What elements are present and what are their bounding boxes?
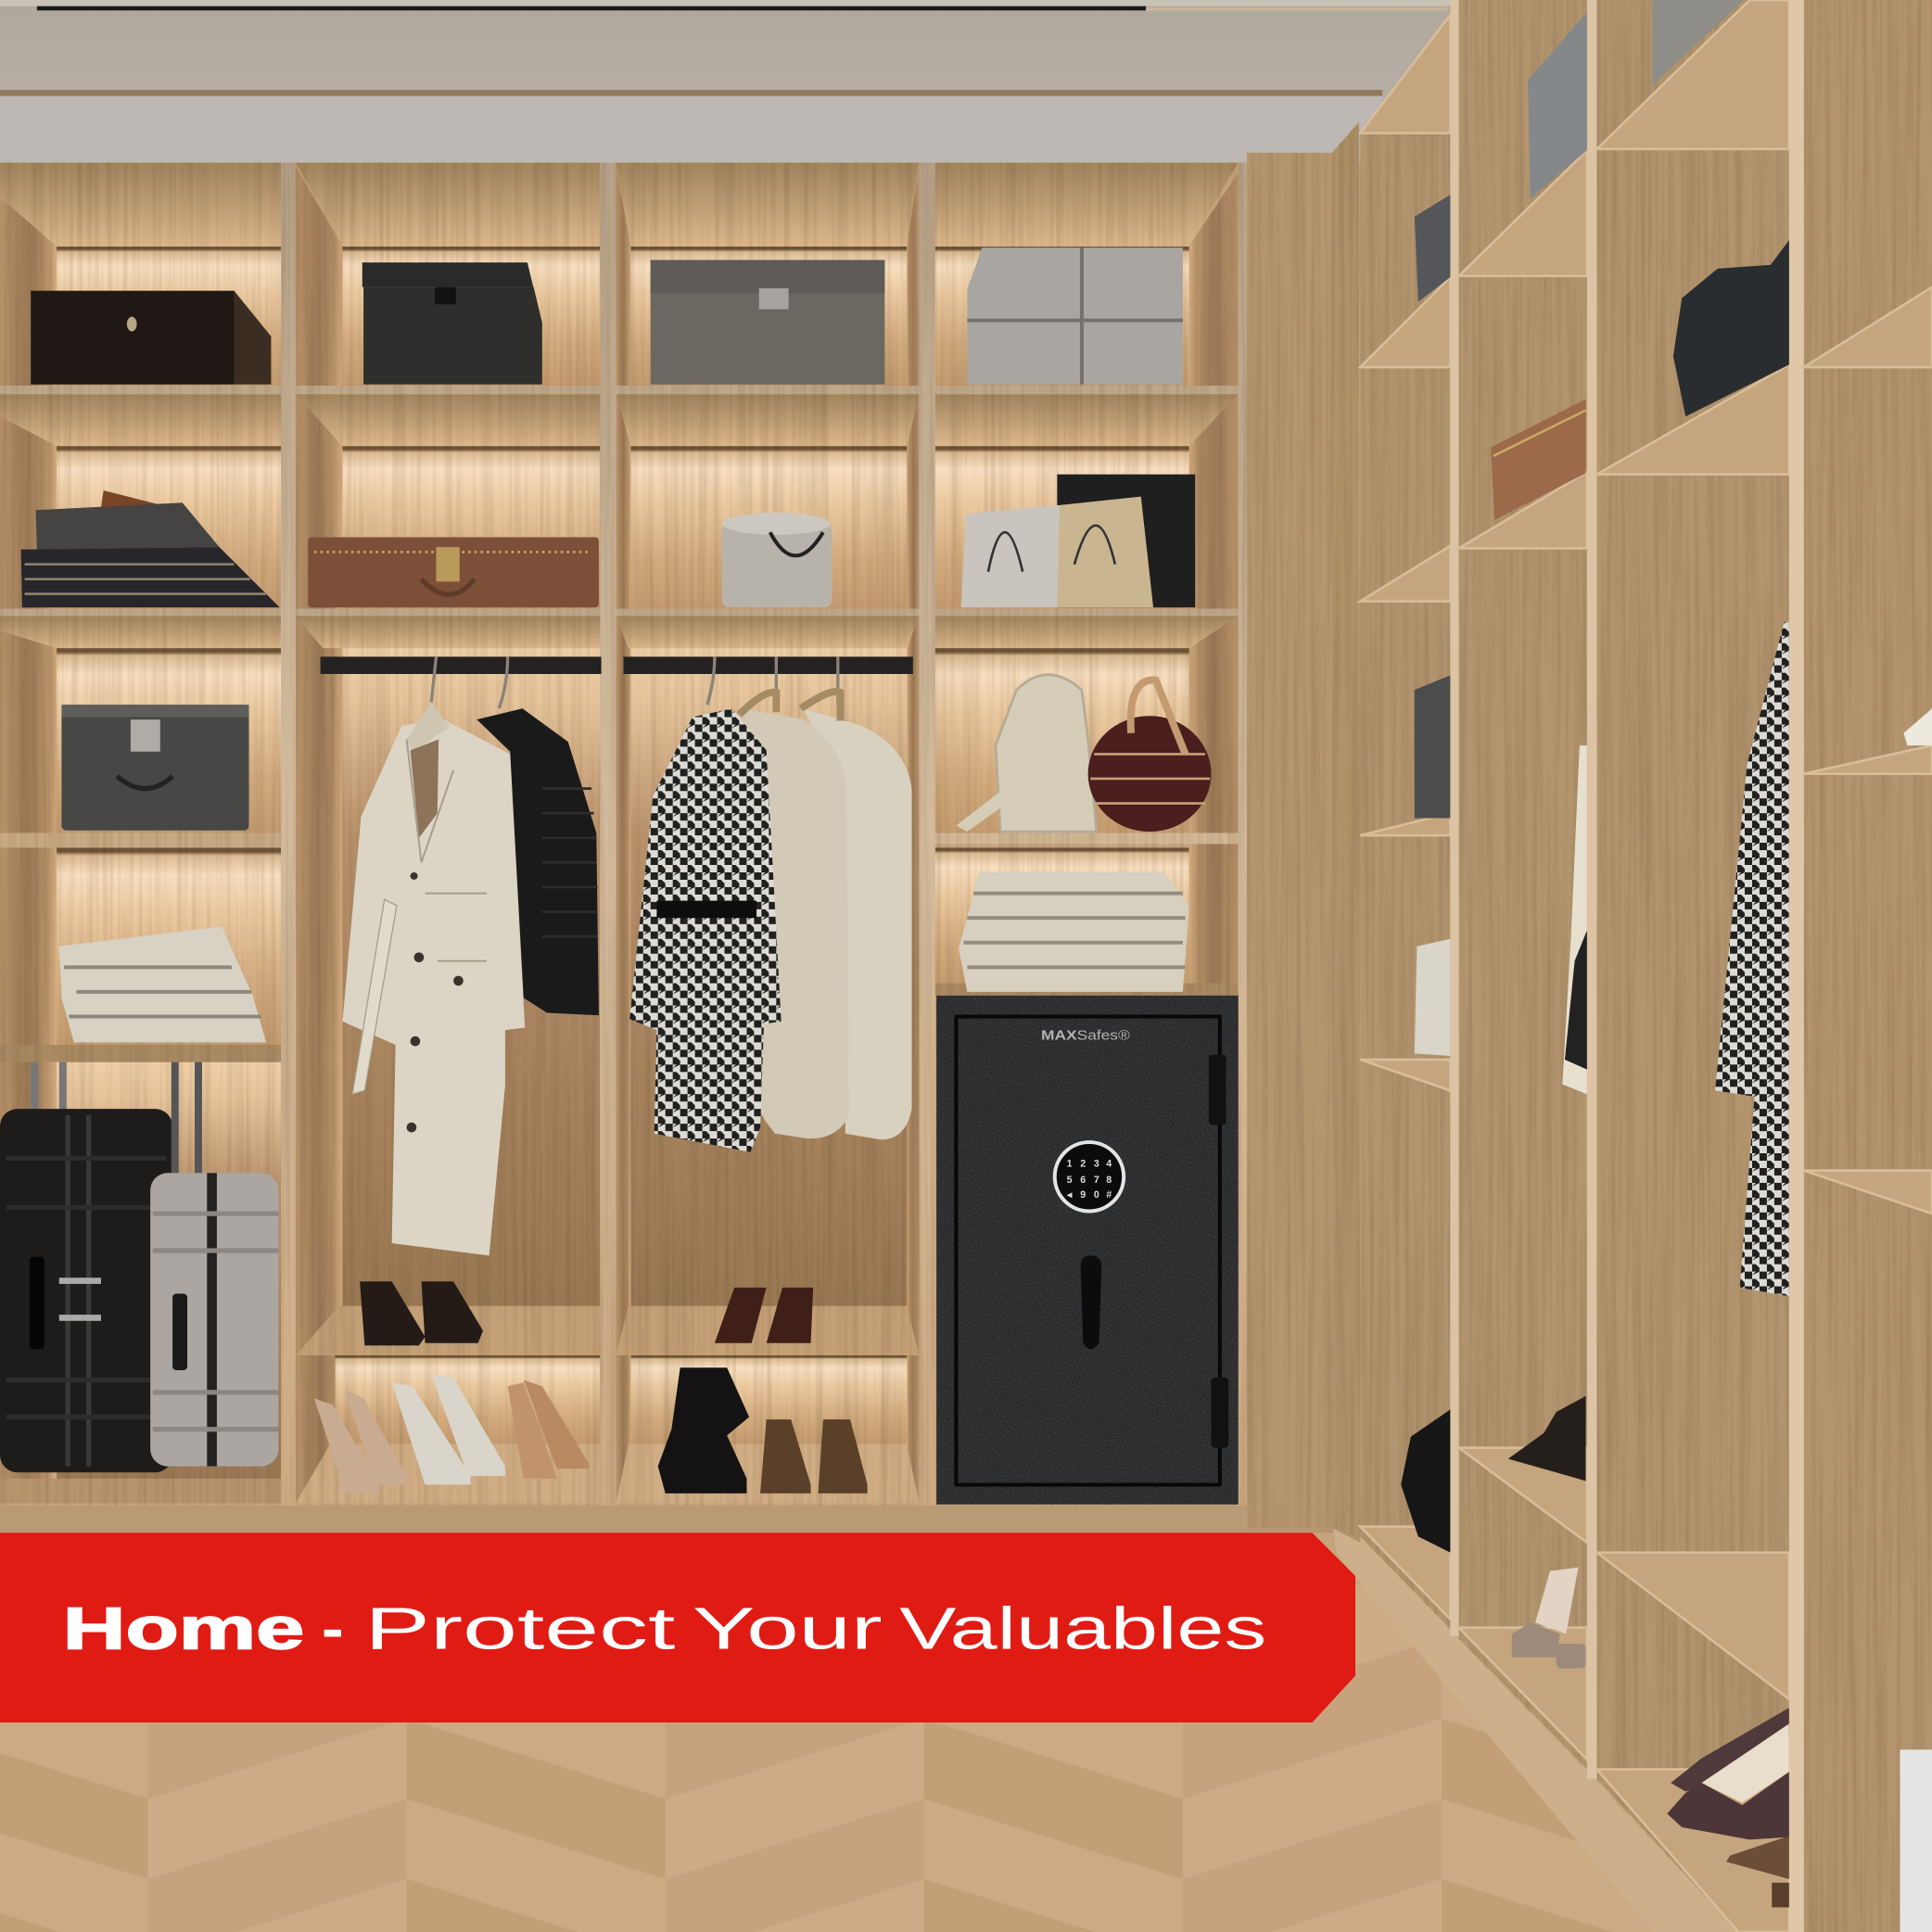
hanger hooks bbox=[707, 656, 838, 708]
shopping bags bbox=[961, 475, 1195, 607]
coat belt bbox=[352, 899, 397, 1094]
beige heels bbox=[1512, 1568, 1586, 1669]
garment bags bbox=[739, 692, 912, 1139]
coat hanger bbox=[407, 703, 450, 752]
black boots bbox=[658, 1367, 749, 1493]
left cabinet frame bbox=[0, 162, 1247, 1532]
black suitcase bbox=[0, 1062, 172, 1472]
items right wall bbox=[1401, 0, 1932, 1932]
electronic keypad lock bbox=[1055, 1142, 1124, 1211]
electronic keypad lock: ◂ bbox=[1066, 1189, 1073, 1201]
dress shoes bbox=[360, 1281, 483, 1345]
right wall shelves bbox=[1360, 0, 1932, 1932]
right wall back panels bbox=[1247, 0, 1932, 1932]
column 2 shelves bbox=[296, 162, 600, 1503]
items column 4 bbox=[956, 248, 1211, 992]
grey fabric box bbox=[651, 260, 884, 385]
coat buttons bbox=[407, 872, 464, 1132]
right wall wood grain bbox=[1247, 0, 1932, 1932]
dark wooden box bbox=[31, 291, 271, 385]
electronic keypad lock: 3 bbox=[1094, 1159, 1099, 1170]
corner stile bbox=[1332, 122, 1360, 1543]
hanging rail bbox=[624, 656, 913, 674]
brown trunk bbox=[308, 537, 599, 607]
electronic keypad lock: 7 bbox=[1094, 1175, 1099, 1186]
tower B shelves bbox=[1459, 150, 1587, 1760]
grey trunk bbox=[1415, 675, 1450, 819]
electronic keypad lock: 0 bbox=[1094, 1189, 1099, 1201]
banner title bbox=[63, 1595, 1266, 1661]
grey cylinder bbox=[1415, 195, 1450, 302]
round burgundy bag bbox=[1088, 680, 1211, 832]
white coat bbox=[1562, 745, 1587, 1094]
electronic keypad lock: 4 bbox=[1106, 1159, 1112, 1170]
brown shoes bbox=[760, 1419, 868, 1493]
electronic keypad lock: 5 bbox=[1067, 1175, 1073, 1186]
upper hinge bbox=[1209, 1055, 1226, 1125]
red banner bbox=[0, 1532, 1355, 1722]
dark fabric box bbox=[362, 262, 544, 385]
electronic keypad lock: 6 bbox=[1080, 1175, 1086, 1186]
black shoe bbox=[1508, 1396, 1586, 1481]
tower stile C/D bbox=[1789, 0, 1804, 1932]
lower hinge bbox=[1211, 1378, 1228, 1448]
grey storage boxes bbox=[967, 248, 1183, 385]
plaid lining bbox=[411, 739, 439, 838]
folded white linens bbox=[59, 926, 266, 1042]
grey trunk bbox=[61, 705, 248, 831]
grey suitcase bbox=[150, 1062, 278, 1467]
safe bbox=[936, 996, 1239, 1505]
door panel bbox=[956, 1016, 1220, 1485]
high heels bbox=[314, 1374, 589, 1493]
burgundy heels bbox=[1667, 1708, 1789, 1839]
black round bag bbox=[1401, 1409, 1450, 1553]
electronic keypad lock: # bbox=[1106, 1189, 1112, 1201]
safe body bbox=[936, 996, 1239, 1505]
tower stile A/B bbox=[1450, 0, 1459, 1636]
banner title: - bbox=[322, 1595, 344, 1661]
white folded linen bbox=[1415, 939, 1450, 1056]
houndstooth coat bbox=[629, 708, 782, 1152]
tower D shelves bbox=[1804, 287, 1932, 1214]
tower A shelves bbox=[1360, 15, 1450, 1619]
items column 1 bbox=[0, 291, 280, 1472]
black duffle bag bbox=[1673, 240, 1789, 416]
tower C back bbox=[1596, 0, 1789, 1932]
electronic keypad lock: 8 bbox=[1106, 1175, 1112, 1186]
quilted handbag bbox=[956, 675, 1097, 832]
grey boxes bbox=[1528, 0, 1744, 198]
white ornament bbox=[1903, 708, 1932, 745]
column 3 shelves bbox=[616, 162, 919, 1503]
tower stile B/C bbox=[1587, 0, 1596, 1779]
electronic keypad lock: 2 bbox=[1080, 1159, 1086, 1170]
folded linen stack bbox=[959, 872, 1189, 992]
tower A back bbox=[1360, 133, 1450, 1629]
cabinet wood grain bbox=[0, 162, 1247, 1506]
banner title: Protect bbox=[364, 1595, 676, 1661]
hanger hooks bbox=[431, 656, 508, 708]
electronic keypad lock: 1 bbox=[1067, 1159, 1073, 1170]
electronic keypad lock: 9 bbox=[1080, 1189, 1086, 1201]
black jacket bbox=[477, 708, 599, 1015]
tower D back bbox=[1804, 0, 1932, 1932]
beige trench coat bbox=[342, 703, 525, 1255]
tower C shelves bbox=[1596, 0, 1789, 1932]
column 1 shelves bbox=[0, 162, 281, 1503]
items column 2 bbox=[308, 262, 602, 1493]
white boxes bbox=[1900, 1749, 1932, 1932]
banner title: Home bbox=[63, 1595, 304, 1661]
banner title: Your bbox=[693, 1595, 883, 1661]
brown shoe bbox=[1726, 1836, 1789, 1907]
wall panel bbox=[1247, 153, 1333, 1532]
houndstooth coat bbox=[1715, 622, 1789, 1296]
brand logo: MAX Safes® bbox=[1041, 1029, 1130, 1044]
cabinet stiles bbox=[0, 162, 1247, 1532]
folded dark blankets bbox=[21, 490, 280, 607]
items column 3 bbox=[624, 260, 913, 1493]
burgundy shoes bbox=[715, 1288, 813, 1343]
hanging rail bbox=[321, 656, 602, 674]
column 4 shelves bbox=[935, 162, 1239, 996]
handle bbox=[1081, 1255, 1101, 1349]
plinth along the floor bbox=[1333, 1528, 1744, 1932]
floor bbox=[0, 1528, 1932, 1932]
tower B back bbox=[1459, 0, 1587, 1770]
ceiling bbox=[0, 0, 1454, 164]
round hat box bbox=[722, 513, 832, 607]
brown case bbox=[1491, 400, 1586, 520]
banner title: Valuables bbox=[899, 1595, 1266, 1661]
